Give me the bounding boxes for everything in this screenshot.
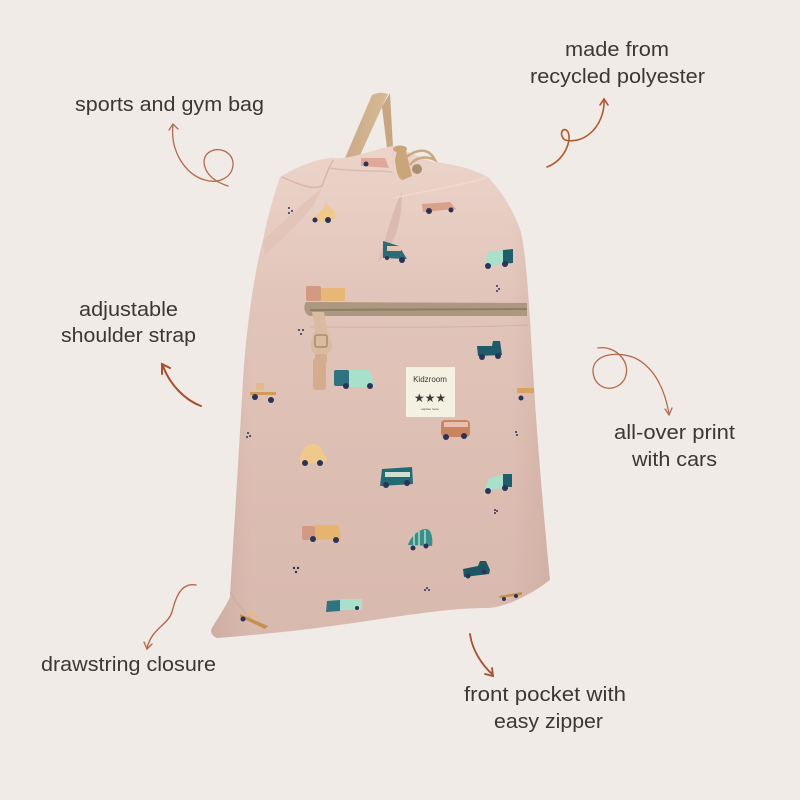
sewn brand label bbox=[406, 367, 455, 417]
sewn brand label: Kidzroom bbox=[413, 375, 447, 384]
car print: orange van at drawstring bbox=[361, 158, 389, 168]
car print: flatbed left bbox=[250, 383, 276, 403]
arrow: drawstring closure bbox=[144, 585, 196, 649]
front zipper bbox=[304, 302, 527, 316]
sewn brand label: explore more bbox=[421, 407, 439, 411]
bag body bbox=[211, 146, 550, 638]
car print: mint truck right bbox=[484, 474, 512, 494]
print dots bbox=[246, 207, 518, 591]
label: made from recycled polyester: made from bbox=[565, 39, 669, 61]
label: made from recycled polyester bbox=[530, 39, 705, 88]
car print: speckled truck behind pocket bbox=[306, 286, 345, 301]
label: all-over print with cars: with cars bbox=[631, 449, 717, 471]
car print: speckled truck bbox=[302, 525, 341, 543]
car print: pickup lower bbox=[463, 561, 490, 578]
arrow: adjustable shoulder strap bbox=[162, 364, 201, 406]
carry strap bbox=[345, 93, 393, 162]
car print: teal bus bbox=[380, 467, 413, 488]
car print: flatbed bottom left bbox=[240, 610, 268, 629]
bag illustration bbox=[211, 93, 550, 638]
bag edge shading bbox=[211, 146, 550, 638]
car print: mint truck top right bbox=[484, 249, 513, 269]
car print: mint truck bottom bbox=[326, 599, 362, 612]
label: front pocket with easy zipper: front pocket with bbox=[464, 684, 626, 706]
arrow: sports and gym bag bbox=[169, 124, 233, 186]
label: all-over print with cars bbox=[614, 422, 735, 471]
top hem and folds bbox=[231, 160, 528, 622]
label: all-over print with cars: all-over print bbox=[614, 422, 735, 444]
car print: flatbed bottom right bbox=[499, 592, 522, 601]
car print: striped green car bbox=[408, 529, 432, 550]
car print: yellow car top bbox=[312, 203, 337, 223]
label: front pocket with easy zipper: easy zipper bbox=[494, 711, 603, 733]
label: adjustable shoulder strap bbox=[61, 299, 196, 347]
car print: pickup by zipper bbox=[477, 341, 502, 360]
car print: terracotta bus bbox=[441, 420, 470, 440]
label: made from recycled polyester: recycled polyester bbox=[530, 66, 705, 88]
label: adjustable shoulder strap: shoulder strap bbox=[61, 325, 196, 347]
label: sports and gym bag: sports and gym bag bbox=[75, 94, 264, 116]
car print: mint truck left bbox=[334, 370, 375, 389]
car print: flatbed right bbox=[517, 388, 534, 400]
label: drawstring closure: drawstring closure bbox=[41, 654, 216, 676]
car print: terracotta van top bbox=[422, 202, 456, 214]
zipper pull bbox=[311, 312, 332, 390]
sewn brand label: ★★★ bbox=[414, 391, 446, 405]
arrow: made from recycled polyester bbox=[547, 99, 608, 167]
arrow: all-over print with cars bbox=[593, 348, 672, 415]
drawstring and cord stopper bbox=[393, 146, 435, 180]
arrow: front pocket with easy zipper bbox=[470, 634, 493, 676]
label: adjustable shoulder strap: adjustable bbox=[79, 299, 178, 321]
label: front pocket with easy zipper bbox=[464, 684, 626, 733]
car print: teal van bbox=[383, 241, 407, 263]
car print: yellow car middle bbox=[300, 444, 327, 466]
